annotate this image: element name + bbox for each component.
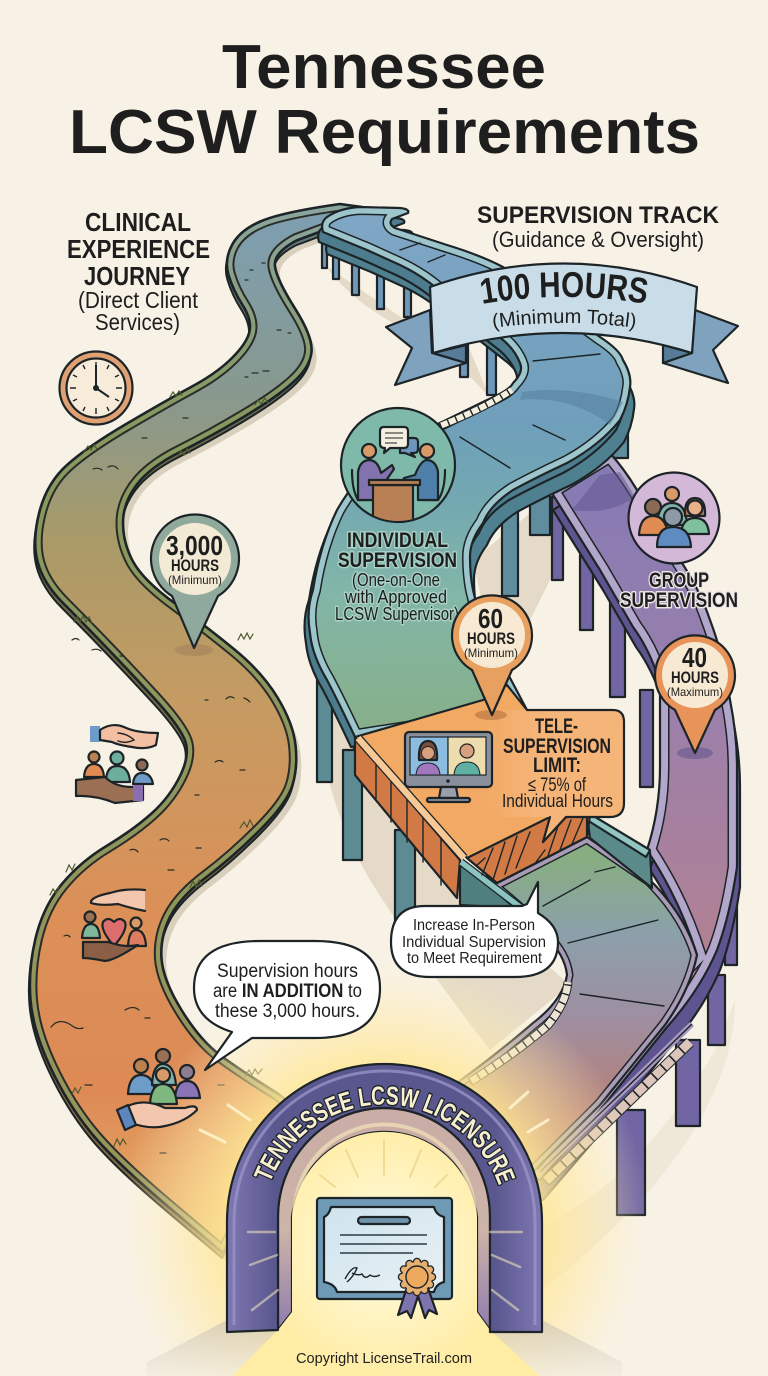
orange surface [355,685,590,883]
heading: supervision track [477,202,720,252]
pin: 3,000 hours minimum [151,514,239,656]
pin: 40 hours maximum: HOURS [671,668,719,687]
right person [420,444,434,458]
heading: clinical experience journey: (Direct Client [78,287,199,313]
pin: 3,000 hours minimum: (Minimum) [168,573,222,587]
banner: 100 hours minimum total [384,262,740,386]
left teal rail [461,862,520,907]
lane marks and overpass shading [400,243,623,468]
icon: individual supervision [341,408,455,525]
back person [665,487,679,501]
arch: Tennessee LCSW licensure [226,1062,544,1376]
heading: clinical experience journey: JOURNEY [84,261,190,291]
pin: 40 hours maximum: 40 [682,642,707,673]
road: individual supervision bridge (blue to green) [305,207,634,759]
callout text: LIMIT: [533,754,581,777]
pin: 60 hours minimum: HOURS [467,629,515,648]
chairs [352,470,445,500]
heading: supervision track: (Guidance & Oversight) [492,227,704,252]
orange wall [355,738,460,898]
callout text: TELE- [535,715,578,738]
panel: tele-supervision section [355,685,652,908]
text: individual supervision: with Approved [344,587,447,607]
railing posts [440,390,512,426]
road: group supervision bridge (purple) [535,455,742,1201]
seal ribbon [398,1288,437,1318]
callout: supervision hours in addition: Supervision hours [217,961,358,982]
merged road lane marks [543,867,664,1006]
heading: clinical experience journey [67,207,210,335]
rays [200,1092,548,1142]
banner tails [386,310,466,385]
arch opening [232,1132,540,1376]
callout: supervision hours in addition [194,941,380,1070]
pin: 40 hours maximum [655,635,735,759]
front person [664,508,682,526]
pin: 60 hours minimum [452,595,532,720]
ground shadows under bridges [316,265,735,1288]
callout: increase in-person supervision [391,882,558,977]
banner body [430,264,697,353]
banner: 100 hours minimum total: 100 HOURS [480,272,648,304]
pin: 3,000 hours minimum: HOURS [171,556,219,575]
callout text: Individual Hours [502,791,613,811]
right wall [587,815,652,888]
callout text: SUPERVISION [503,735,611,758]
pin: 3,000 hours minimum: 3,000 [166,530,223,561]
icon: clock [60,352,132,424]
pin: 60 hours minimum: 60 [478,603,503,634]
text: group supervision: SUPERVISION [620,589,738,612]
left person [645,499,661,515]
callout: supervision hours in addition: are IN ADDITION to [213,981,362,1002]
footer: copyright: Copyright LicenseTrail.com [296,1350,472,1367]
arch inner surface [278,1108,490,1330]
left person [362,444,376,458]
hatched front face [467,816,587,883]
second speech bubble [400,438,418,457]
heading: supervision track: SUPERVISION TRACK [477,202,720,229]
arch: Tennessee LCSW licensure: TENNESSEE LCSW LICENSURE [252,1084,517,1186]
certificate rays [320,1140,447,1187]
text: individual supervision: SUPERVISION [338,549,457,572]
callout: tele-supervision limit [480,710,624,842]
icon: caring hands with group 2 [117,1049,200,1130]
right person [685,498,705,516]
text: individual supervision: INDIVIDUAL [347,529,448,552]
grass tufts and pebble marks [50,391,268,1146]
road: merged lower bridge [440,837,697,1182]
text: group supervision [620,569,738,612]
main speech bubble [380,427,408,453]
callout text: ≤ 75% of [528,775,587,796]
callout: increase in-person supervision: Individual Supervision [402,934,546,951]
glow: licensure light [119,960,649,1376]
pin: 60 hours minimum: (Minimum) [464,646,518,660]
text: individual supervision [335,529,459,624]
title: LCSW Requirements [69,98,700,167]
text: individual supervision: LCSW Supervisor) [335,604,459,624]
heading: clinical experience journey: EXPERIENCE [67,234,210,264]
table [373,485,413,525]
lower right railing [540,1024,692,1182]
title [69,33,700,167]
arch lettering [270,1104,498,1183]
heading: clinical experience journey: CLINICAL [85,207,191,237]
banner: 100 hours minimum total: (Minimum Total) [493,309,636,332]
icon: caring hands with heart [82,889,146,961]
pin: 40 hours maximum: (Maximum) [667,685,723,699]
heading: clinical experience journey: Services) [95,309,180,335]
arch rays [248,1232,522,1310]
callout: supervision hours in addition: these 3,000 hours. [215,1001,360,1022]
lower left railing [470,982,568,1082]
orange rail [358,738,464,858]
icon: video call monitor [405,732,492,802]
side wall left [460,862,515,908]
road: clinical experience journey [29,204,367,1262]
title: Tennessee [222,33,546,102]
text: group supervision: GROUP [649,569,709,592]
text: individual supervision: (One-on-One [352,570,440,590]
bridge pillars [317,240,737,1215]
callout: increase in-person supervision: Increase In-Person [413,917,535,934]
arch front band [227,1064,542,1332]
callout: increase in-person supervision: to Meet Requirement [407,950,543,967]
icon: group supervision [628,472,720,564]
callout text [502,715,613,811]
icon: certificate [317,1140,452,1318]
seal [398,1258,436,1296]
icon: caring hands with group 1 [76,725,158,803]
